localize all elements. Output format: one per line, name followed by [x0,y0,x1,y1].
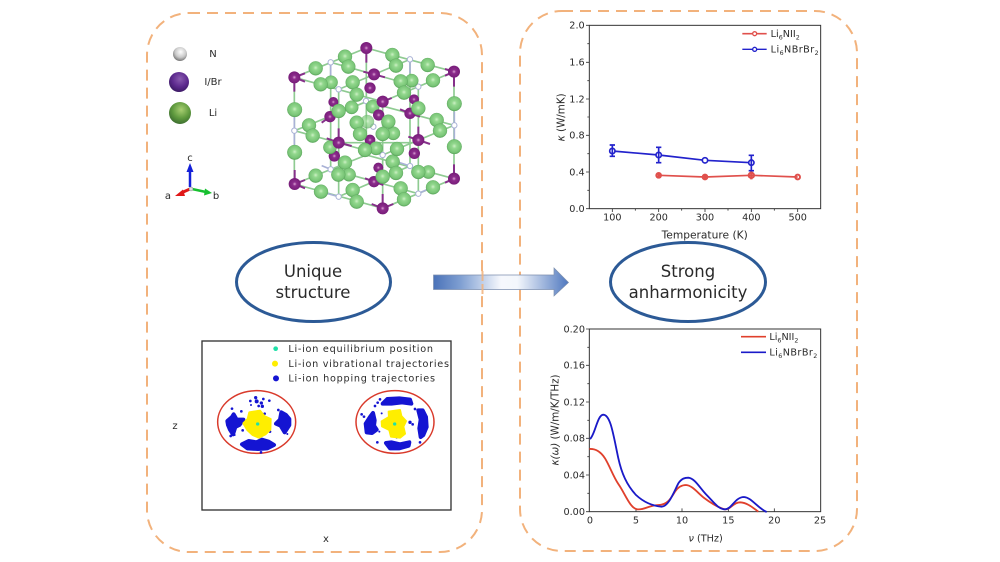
legend [742,29,819,57]
oval: unique structure: Unique [284,262,342,281]
y tick labels: 0.12 [563,397,585,408]
x tick labels: 300 [696,213,714,224]
y tick labels: 0.04 [563,470,585,481]
front atoms [287,59,462,214]
oval: strong anharmonicity: anharmonicity [629,283,748,302]
chart: spectral thermal conductivity [550,324,826,545]
left Li-ion site [218,391,296,454]
x tick labels: 0 [587,515,593,526]
icon: lithium sphere [169,102,191,124]
legend: 6 [780,50,784,57]
trajectory legend: Li-ion equilibrium position [288,344,433,355]
legend: 2 [794,337,798,344]
legend: 2 [815,50,819,57]
y axis title: κ(ω) (W/m/K/THz) [550,374,562,466]
x tick labels: 15 [722,515,734,526]
label: I/Br: I/Br [204,77,223,88]
curve: Li6NBrBr2 [590,415,767,512]
y tick labels: 0.00 [563,507,585,518]
trajectory legend [272,344,449,385]
icon: crystal axes [165,153,219,202]
x axis title: ν (THz) [689,534,723,545]
plot frame [202,341,451,510]
nitrogen atoms [292,57,457,199]
crystal structure [287,42,462,214]
y tick labels: 0.0 [569,204,585,215]
x tick labels: 20 [768,515,780,526]
legend: Li [769,332,777,343]
legend [741,332,817,360]
x axis title: Temperature (K) [661,228,748,241]
panel: unique structure [147,13,482,552]
icon: crystal axes: b [213,191,219,202]
y tick labels: 2.0 [569,21,585,32]
y axis title: κ (W/mK) [556,93,568,141]
back atoms [302,42,444,187]
legend: 2 [796,34,800,41]
legend: 2 [813,353,817,360]
legend: Li [771,45,779,56]
legend: NII [781,332,794,343]
trajectory legend: Li-ion hopping trajectories [288,374,435,385]
y tick labels: 0.4 [569,167,585,178]
y tick labels: 1.2 [569,94,585,105]
label: N: N [209,49,217,60]
right Li-ion site [356,391,434,453]
legend: 6 [778,353,782,360]
legend: Li [769,348,778,359]
arrow [434,268,568,296]
legend: NII [783,29,796,40]
x tick labels: 25 [814,515,826,526]
atom legend [169,47,223,124]
icon: iodine/bromine sphere [169,72,189,92]
icon: crystal axes: a [165,191,171,202]
x tick labels: 200 [649,213,668,224]
series: Li6NII2 [656,171,800,180]
legend: NBrBr [784,45,814,56]
legend: Li [771,29,779,40]
y tick labels: 1.6 [569,58,585,69]
series: Li6NBrBr2 [610,145,754,171]
curve: Li6NII2 [589,449,758,512]
legend: 6 [777,337,781,344]
x tick labels: 5 [633,515,639,526]
y tick labels: 0.20 [563,324,585,335]
x tick labels: 500 [788,213,807,224]
x tick labels: 400 [742,213,761,224]
oval: unique structure: structure [276,283,350,302]
oval: unique structure [236,242,390,322]
chart: thermal conductivity vs temperature [556,21,821,241]
y tick labels: 0.8 [569,131,585,142]
trajectory plot [202,341,451,510]
oval: strong anharmonicity: Strong [661,262,715,281]
y tick labels: 0.08 [563,434,585,445]
icon: crystal axes: c [187,153,193,164]
y tick labels: 0.16 [563,361,585,372]
x tick labels: 100 [603,213,622,224]
oval: strong anharmonicity [610,242,766,322]
icon: nitrogen sphere [173,47,187,61]
axis label: z: z [172,421,178,432]
legend: 6 [779,34,783,41]
y tick labels [563,324,585,518]
axis label: x: x [323,534,329,545]
trajectory legend: Li-ion vibrational trajectories [288,359,449,370]
label: Li: Li [209,108,217,119]
legend: NBrBr [783,348,813,359]
x tick labels [603,213,807,224]
panel: strong anharmonicity [520,11,857,551]
y tick labels [569,21,585,215]
x tick labels: 10 [676,515,688,526]
x tick labels [587,515,826,526]
